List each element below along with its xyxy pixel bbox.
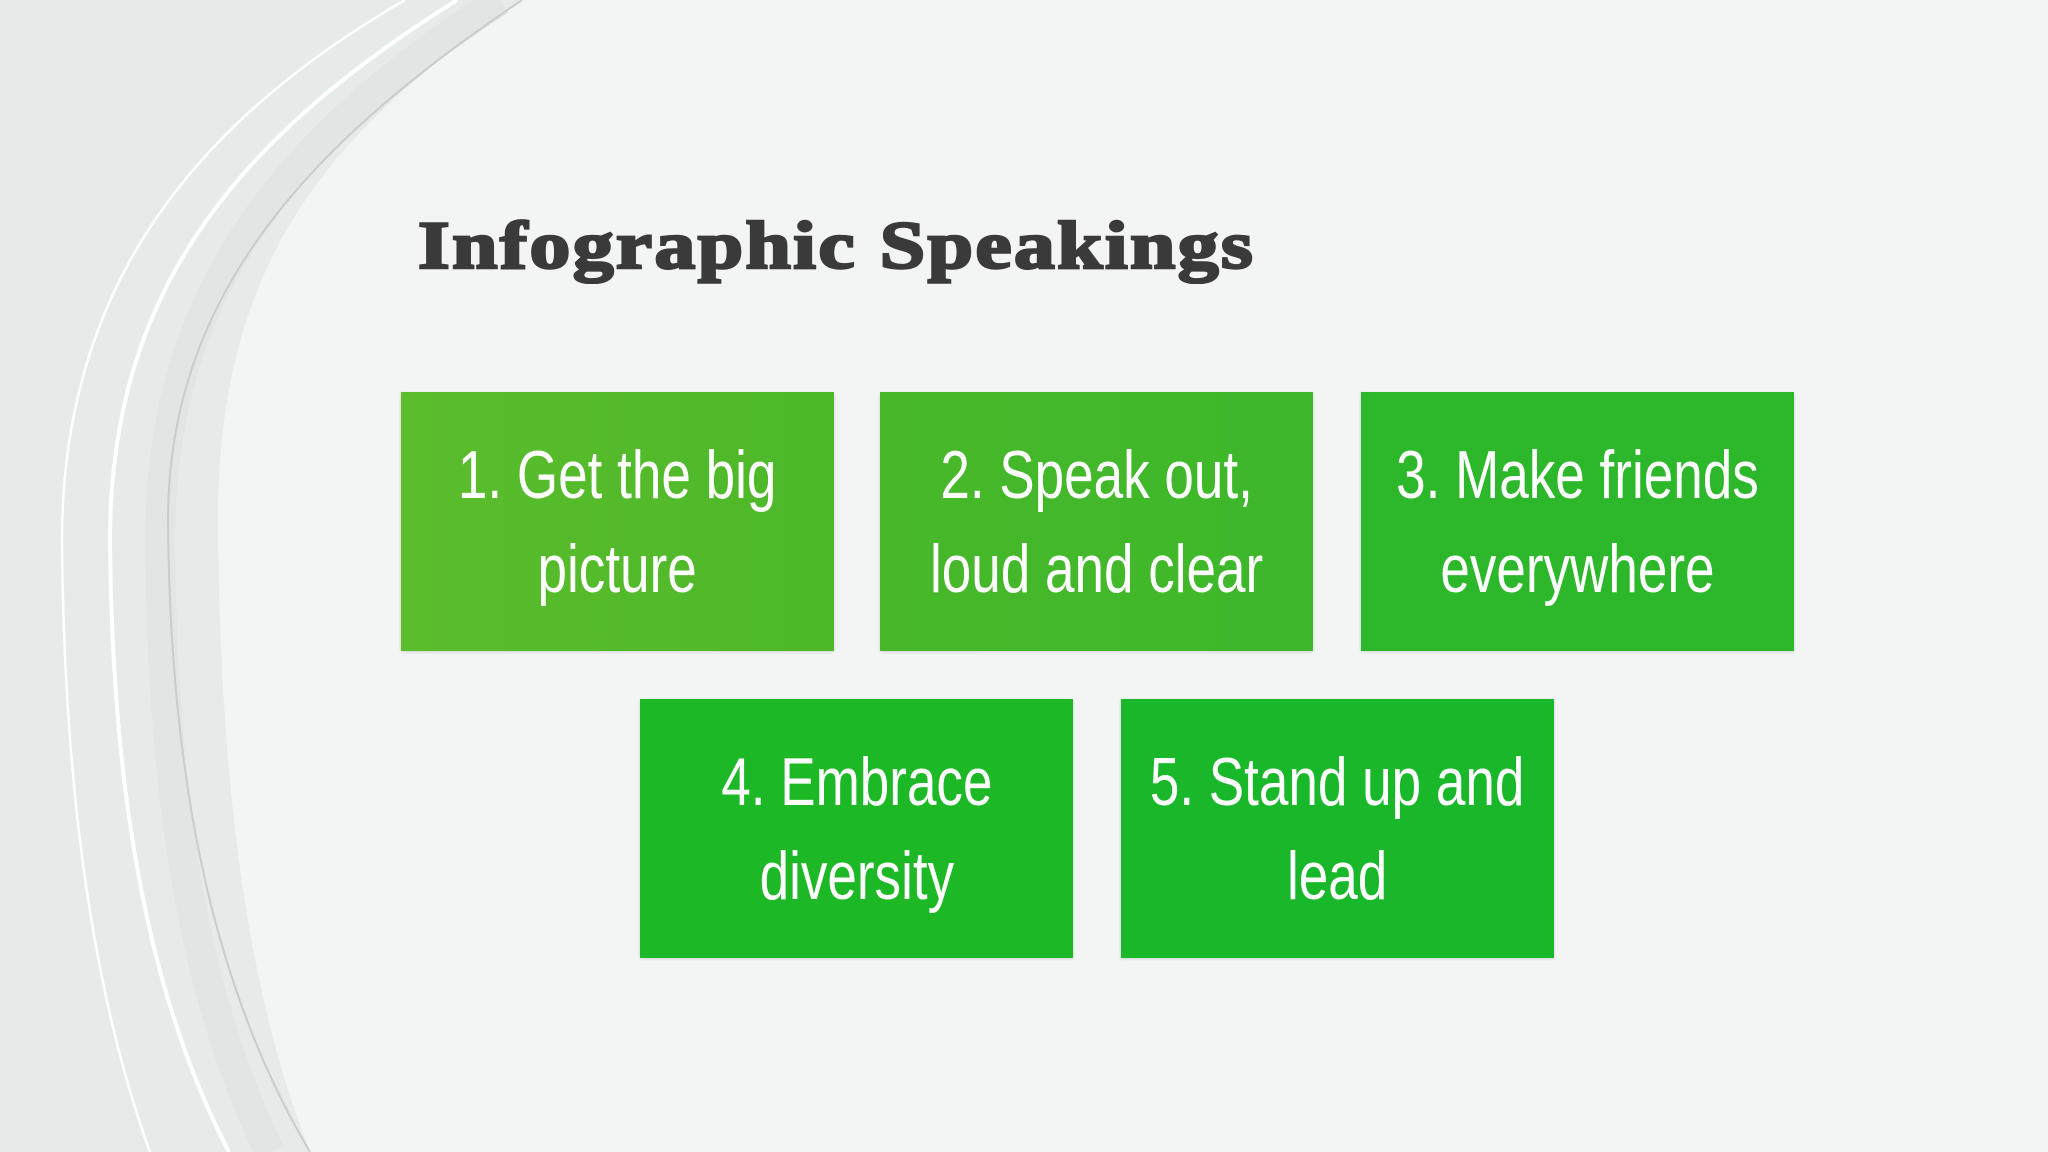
box 3 [1361, 392, 1794, 651]
box 5: 5. Stand up and [1150, 744, 1525, 820]
box 1 [401, 392, 834, 651]
box 3: 3. Make friends [1396, 436, 1759, 512]
title: Infographic Speakings [418, 207, 1255, 283]
box 2 [880, 392, 1313, 651]
box 2: 2. Speak out, [940, 436, 1253, 512]
box 3: everywhere [1440, 530, 1715, 606]
box 2: loud and clear [930, 530, 1263, 606]
box 1: picture [538, 530, 697, 606]
box 4: diversity [759, 838, 954, 914]
box 1: 1. Get the big [458, 436, 777, 512]
box 5 [1121, 699, 1554, 958]
box 4 [640, 699, 1073, 958]
box 4: 4. Embrace [721, 744, 992, 820]
box 5: lead [1287, 838, 1388, 914]
